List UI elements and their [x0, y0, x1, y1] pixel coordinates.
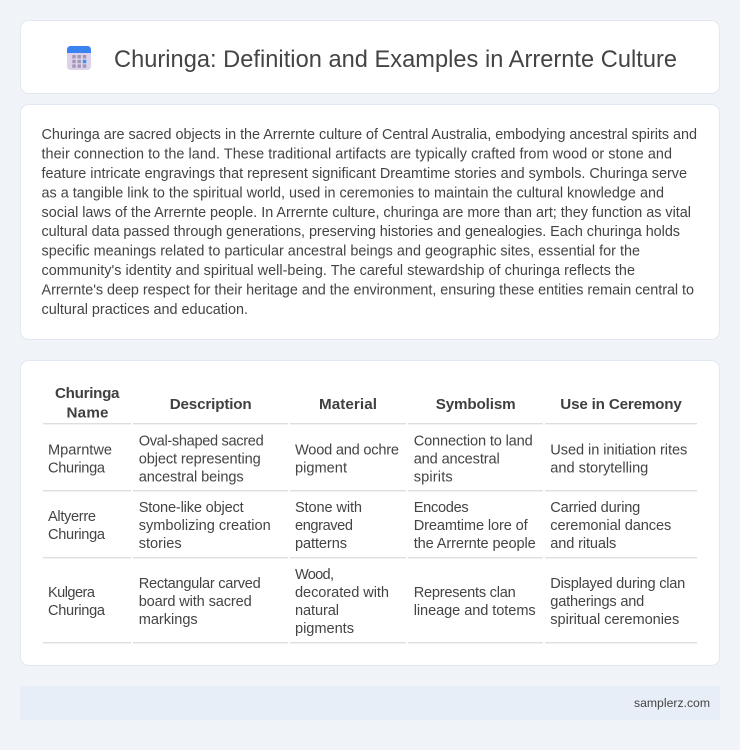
- table row: Altyerre Churinga: engraved: [295, 518, 353, 534]
- text block: definition: as a tangible link to the spiritual world, used in ceremonies to maintain the cultural knowledge and: [42, 185, 664, 201]
- table row: Kulgera Churinga: Represents clan: [414, 585, 516, 601]
- text block: definition: Arrernte's deep respect for their heritage and the environment, ensuring these entities remain central to: [42, 282, 694, 298]
- table row: Altyerre Churinga: symbolizing creation: [139, 518, 271, 534]
- table row: Kulgera Churinga: Rectangular carved: [139, 576, 261, 592]
- table row: Altyerre Churinga: the Arrernte people: [414, 536, 536, 552]
- table row: Kulgera Churinga: [48, 567, 685, 637]
- table row: Mparntwe Churinga: Connection to land: [414, 434, 533, 450]
- panel: definition paragraph: [20, 104, 720, 340]
- text block: definition: their connection to the land. These traditional artifacts are typically crafted from wood or stone and: [42, 146, 672, 162]
- table header row: [55, 385, 682, 422]
- table row: Altyerre Churinga: Churinga: [48, 527, 106, 543]
- table row: Altyerre Churinga: Carried during: [550, 500, 640, 516]
- table header row: Description: [170, 396, 252, 413]
- table row: Mparntwe Churinga: ancestral beings: [139, 470, 244, 486]
- panel: title header: [20, 20, 720, 94]
- footer bar: [20, 686, 720, 720]
- table row: Mparntwe Churinga: Oval-shaped sacred: [139, 434, 264, 450]
- table row: Mparntwe Churinga: [48, 434, 687, 486]
- table row: Altyerre Churinga: [48, 500, 671, 552]
- table row: Altyerre Churinga: Altyerre: [48, 509, 96, 525]
- text block: definition: [42, 127, 697, 318]
- table header row: Churinga: [55, 385, 120, 402]
- table row: Altyerre Churinga: Stone-like object: [139, 500, 244, 516]
- table row: Altyerre Churinga: patterns: [295, 536, 347, 552]
- table row: Altyerre Churinga: Encodes: [414, 500, 469, 516]
- text block: definition: Churinga are sacred objects in the Arrernte culture of Central Australia, embodying ancestral spirits and: [42, 127, 697, 143]
- table row: Mparntwe Churinga: and ancestral: [414, 452, 500, 468]
- table row: Kulgera Churinga: Wood,: [295, 567, 334, 583]
- table header row: Use in Ceremony: [560, 396, 682, 413]
- table header row: Material: [319, 396, 377, 413]
- table row: Kulgera Churinga: spiritual ceremonies: [550, 612, 679, 628]
- table row: Kulgera Churinga: natural: [295, 603, 339, 619]
- table row: Kulgera Churinga: Displayed during clan: [550, 576, 685, 592]
- text block: definition: cultural data passed through generations, preserving histories and genealogies. Each churinga holds: [42, 224, 680, 240]
- text block: definition: feature intricate engravings that represent significant Dreamtime stories and symbols. Churinga serve: [42, 166, 687, 182]
- table row: Altyerre Churinga: ceremonial dances: [550, 518, 671, 534]
- table row: Kulgera Churinga: markings: [139, 612, 198, 628]
- table row: Mparntwe Churinga: spirits: [414, 470, 453, 486]
- table row: Mparntwe Churinga: Mparntwe: [48, 442, 112, 458]
- table row: Kulgera Churinga: lineage and totems: [414, 603, 536, 619]
- text block: definition: specific meanings related to particular ancestral beings and geographic sites, essential for the: [42, 244, 640, 260]
- table row: Altyerre Churinga: Stone with: [295, 500, 362, 516]
- table row: Altyerre Churinga: and rituals: [550, 536, 616, 552]
- table row: Kulgera Churinga: decorated with: [295, 585, 389, 601]
- title: Churinga: Definition and Examples in Arrernte Culture: [114, 47, 677, 73]
- icon: calendar: [67, 46, 91, 70]
- text block: definition: social laws of the Arrernte people. In Arrernte culture, churinga are more than art; they function as vital: [42, 205, 691, 221]
- table row: Mparntwe Churinga: object representing: [139, 452, 261, 468]
- text block: definition: cultural practices and education.: [42, 302, 248, 318]
- footer text: samplerz.com: [634, 696, 710, 710]
- table row: Kulgera Churinga: gatherings and: [550, 594, 644, 610]
- text block: definition: community's identity and spiritual well-being. The careful stewardship of churinga reflects the: [42, 263, 635, 279]
- table row: Kulgera Churinga: pigments: [295, 621, 354, 637]
- table row: Mparntwe Churinga: Used in initiation rites: [550, 442, 687, 458]
- table row: Kulgera Churinga: Kulgera: [48, 585, 96, 601]
- table header row: Name: [66, 404, 108, 422]
- table row: Mparntwe Churinga: Wood and ochre: [295, 442, 399, 458]
- table row: Mparntwe Churinga: and storytelling: [550, 460, 648, 476]
- table row: Altyerre Churinga: stories: [139, 536, 182, 552]
- table header row: Symbolism: [436, 396, 516, 413]
- table row: Kulgera Churinga: board with sacred: [139, 594, 252, 610]
- table row: Mparntwe Churinga: Churinga: [48, 460, 106, 476]
- table row: Mparntwe Churinga: pigment: [295, 460, 347, 476]
- table row: Kulgera Churinga: Churinga: [48, 603, 106, 619]
- panel: churinga table: [20, 360, 720, 666]
- table row: Altyerre Churinga: Dreamtime lore of: [414, 518, 529, 534]
